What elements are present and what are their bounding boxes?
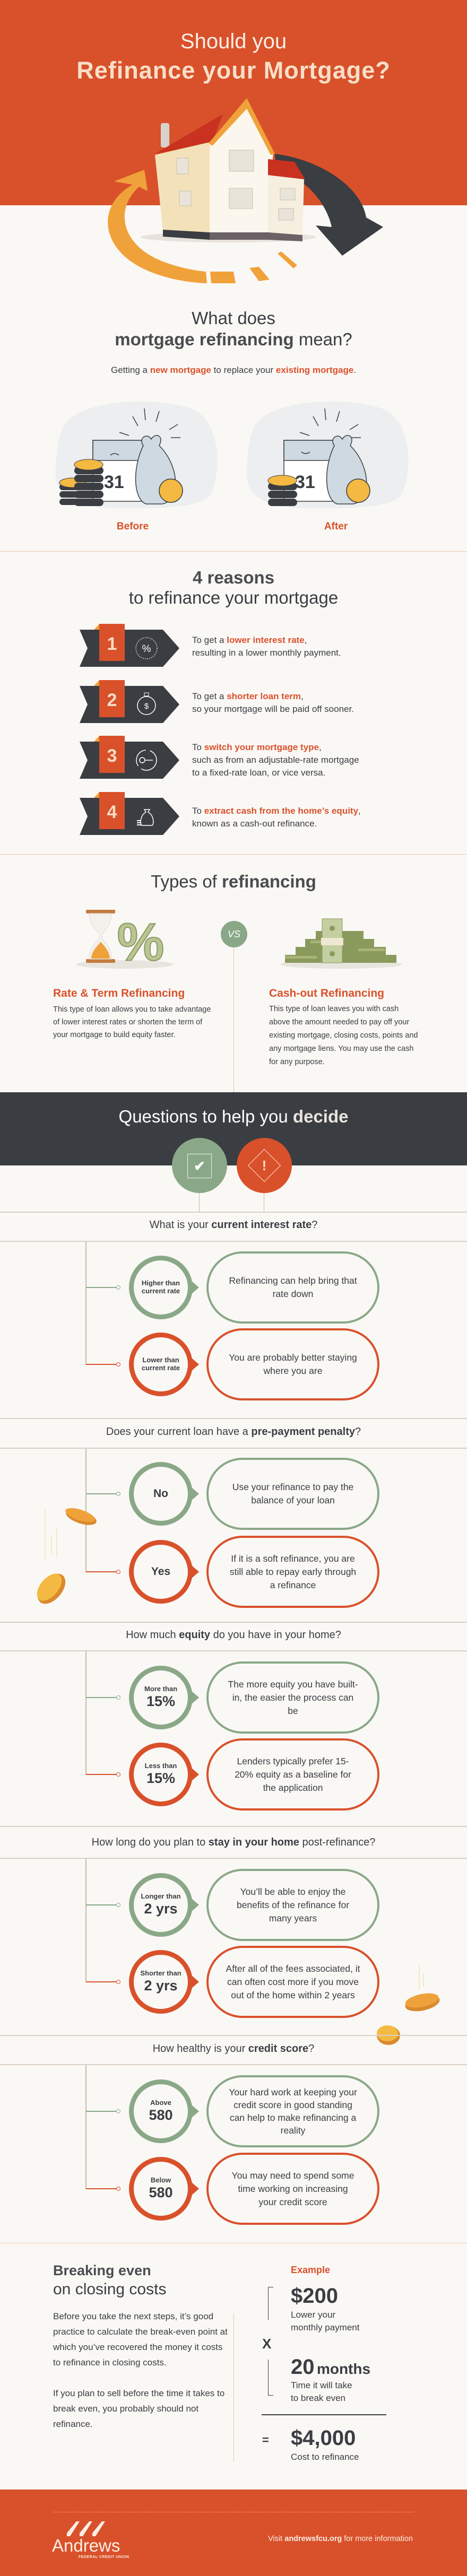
- icon: check: [172, 1138, 227, 1193]
- panel: example calculation: $4,000: [291, 2426, 356, 2450]
- ribbon 4: [80, 792, 179, 835]
- option: yes: If it is a soft refinance, you are still able to repay early through a refinance: [230, 1553, 356, 1590]
- panel: rate & term: Rate & Term Refinancing: [53, 987, 185, 999]
- illustration: after: 31: [295, 472, 315, 492]
- panel: breaking even text: on closing costs: [53, 2281, 166, 2298]
- option: higher: Higher than: [142, 1279, 180, 1287]
- Q1: [0, 1212, 467, 1213]
- option: less than 15%: [86, 1738, 379, 1811]
- Q3: [0, 1622, 467, 1623]
- option: above 580: [86, 2075, 379, 2147]
- panel: example calculation: Cost to refinance: [291, 2452, 359, 2462]
- text: reason 4: known as a cash-out refinance.: [192, 819, 317, 829]
- text: visit: Visit andrewsfcu.org for more information: [268, 2535, 413, 2543]
- ribbon 3: [80, 736, 179, 779]
- heading: 4 reasons: [129, 568, 338, 607]
- text: reason 2: To get a shorter loan term,: [192, 691, 304, 701]
- option: shorter than 2 yrs: Shorter than: [140, 1969, 181, 1977]
- illustration: before: 31: [104, 472, 124, 492]
- option: no: [86, 1458, 379, 1530]
- text: reason 3: [192, 742, 359, 778]
- panel: breaking even text: Breaking even: [53, 2262, 151, 2278]
- heading: 4 reasons: 4 reasons: [193, 568, 274, 587]
- text: reason 1: resulting in a lower monthly payment.: [192, 648, 341, 658]
- questions band: [0, 1092, 467, 1165]
- ribbon 1: %: [142, 643, 151, 655]
- ribbon 2: 2: [107, 690, 117, 710]
- option: above 580: 580: [149, 2107, 173, 2123]
- option: lower: Lower than: [142, 1356, 179, 1364]
- panel: rate & term: This type of loan allows you to take advantage of lower interest rates or shorten the term of your mortgage to build equity faster.: [53, 1005, 211, 1039]
- illustration: house with arrows: [108, 98, 383, 283]
- option: lower: current rate: [142, 1364, 180, 1372]
- panel: breaking even text: If you plan to sell before the time it takes to break even, you probably should not refinance.: [53, 2388, 224, 2429]
- heading: 4 reasons: to refinance your mortgage: [129, 588, 338, 607]
- option: above 580: Your hard work at keeping your credit score in good standing can help to make refinancing a reality: [229, 2087, 357, 2136]
- Q2: [0, 1418, 467, 1419]
- ribbon 2: [80, 680, 179, 723]
- title: Should you: [180, 30, 287, 53]
- icon: coins falling left: [37, 1508, 97, 1604]
- option: lower: [86, 1328, 379, 1400]
- option: more than 15%: More than: [144, 1685, 177, 1693]
- text: reason 4: [192, 806, 361, 829]
- panel: example calculation: monthly payment: [291, 2322, 359, 2333]
- option: below 580: Below: [151, 2176, 171, 2184]
- option: more than 15%: The more equity you have built-in, the easier the process can be: [228, 1678, 358, 1716]
- icon: warning: !: [262, 1158, 266, 1173]
- icon: warning: [237, 1138, 292, 1193]
- header band: [0, 0, 467, 205]
- heading: what does refinancing mean: What does: [192, 308, 275, 328]
- option: more than 15%: [86, 1661, 379, 1734]
- heading: what does refinancing mean: [115, 308, 352, 349]
- icon: house: [141, 98, 316, 242]
- ribbon 3: 3: [107, 746, 117, 766]
- footer: [0, 2490, 467, 2576]
- panel: example calculation: Example: [291, 2265, 330, 2275]
- option: yes: [86, 1536, 379, 1608]
- text: reason 4: To extract cash from the home’s equity,: [192, 806, 361, 816]
- option: less than 15%: Less than: [145, 1762, 177, 1770]
- option: below 580: [86, 2153, 379, 2225]
- logo: Andrews: FEDERAL CREDIT UNION: [79, 2555, 129, 2559]
- question 4: How long do you plan to stay in your home post-refinance?: [92, 1837, 375, 1848]
- option: shorter than 2 yrs: 2 yrs: [144, 1978, 178, 1994]
- option: below 580: 580: [149, 2185, 173, 2200]
- panel: example calculation: [262, 2265, 386, 2462]
- panel: example calculation: =: [262, 2433, 269, 2447]
- option: below 580: You may need to spend some time working on increasing your credit score: [232, 2170, 354, 2207]
- ribbon 2: $: [144, 702, 149, 711]
- text: reason 3: to a fixed-rate loan, or vice versa.: [192, 768, 325, 778]
- text: reason 1: To get a lower interest rate,: [192, 635, 307, 645]
- panel: breaking even text: [53, 2262, 228, 2429]
- logo: Andrews: [52, 2520, 137, 2563]
- option: above 580: Above: [150, 2099, 171, 2107]
- text: reason 3: such as from an adjustable-rate mortgage: [192, 755, 359, 765]
- icon: hourglass and percent: %: [117, 912, 164, 971]
- panel: cash-out: Cash-out Refinancing: [269, 987, 384, 999]
- heading: what does refinancing mean: mortgage refinancing mean?: [115, 329, 352, 349]
- text: definition: Getting a new mortgage to replace your existing mortgage.: [111, 365, 356, 375]
- title: [76, 30, 391, 84]
- option: no: Use your refinance to pay the balance of your loan: [232, 1482, 353, 1505]
- option: less than 15%: 15%: [146, 1770, 175, 1786]
- option: yes: Yes: [151, 1565, 170, 1578]
- ribbon 1: [80, 624, 179, 667]
- text: reason 3: To switch your mortgage type,: [192, 742, 322, 752]
- icon: orange arrow: [108, 170, 297, 283]
- panel: example calculation: Lower your: [291, 2310, 335, 2320]
- icon: coins falling right: [377, 1965, 439, 2045]
- panel: breaking even text: Before you take the next steps, it’s good practice to calculate the break-even point at which you’ve recovered the money it costs to refinance in closing costs.: [53, 2311, 228, 2368]
- question 5: How healthy is your credit score?: [153, 2043, 314, 2055]
- icon: check: ✔: [194, 1158, 205, 1174]
- connector lines from icons: [199, 1188, 200, 1212]
- question 1: What is your current interest rate?: [150, 1219, 317, 1231]
- panel: cash-out: This type of loan leaves you with cash above the amount needed to pay off your existing mortgage, closing costs, points and any mortgage liens. You may use the cash for any purpose.: [269, 1005, 418, 1066]
- question 3: How much equity do you have in your home?: [126, 1629, 341, 1641]
- panel: example calculation: Time it will take: [291, 2380, 352, 2390]
- heading: types of refinancing: Types of refinancing: [151, 872, 316, 891]
- ribbon 1: 1: [107, 634, 117, 654]
- panel: rate & term: [53, 987, 211, 1039]
- title: Refinance your Mortgage?: [76, 57, 391, 84]
- option: higher: [86, 1251, 379, 1324]
- icon: hourglass and percent: [76, 910, 174, 971]
- icon: dark arrow: [275, 154, 383, 256]
- option: higher: current rate: [142, 1287, 180, 1295]
- option: shorter than 2 yrs: [86, 1946, 379, 2018]
- panel: example calculation: $200: [291, 2284, 338, 2308]
- option: longer than 2 yrs: 2 yrs: [144, 1901, 178, 1917]
- label: after: After: [324, 521, 348, 532]
- icon: money pile: [280, 919, 402, 969]
- option: longer than 2 yrs: You’ll be able to enjoy the benefits of the refinance for many years: [237, 1886, 349, 1924]
- ribbon 4: 4: [107, 802, 117, 822]
- heading: questions: Questions to help you decide: [119, 1107, 348, 1126]
- option: longer than 2 yrs: [86, 1869, 379, 1941]
- vs circle and divider: [233, 947, 234, 1092]
- panel: example calculation: X: [262, 2336, 271, 2352]
- text: VS: [228, 929, 240, 939]
- text: reason 2: [192, 691, 354, 714]
- text: reason 1: [192, 635, 341, 658]
- label: before: Before: [117, 521, 149, 532]
- panel: example calculation: to break even: [291, 2393, 345, 2403]
- illustration: after: [246, 402, 409, 508]
- option: more than 15%: 15%: [146, 1693, 175, 1709]
- option: higher: Refinancing can help bring that rate down: [229, 1275, 357, 1299]
- panel: example calculation: 20 months: [291, 2355, 370, 2379]
- question 2: Does your current loan have a pre-payment penalty?: [106, 1426, 361, 1438]
- text: reason 2: so your mortgage will be paid off sooner.: [192, 704, 354, 714]
- Q4: [0, 1826, 467, 1827]
- option: less than 15%: Lenders typically prefer 15-20% equity as a baseline for the application: [235, 1756, 351, 1793]
- illustration: before: [55, 402, 218, 508]
- Q5: [0, 2035, 467, 2036]
- option: no: No: [153, 1487, 168, 1500]
- logo: Andrews: Andrews: [52, 2536, 120, 2555]
- option: shorter than 2 yrs: After all of the fees associated, it can often cost more if you move out of the home within 2 years: [226, 1963, 360, 2000]
- option: longer than 2 yrs: Longer than: [141, 1892, 181, 1900]
- option: lower: You are probably better staying where you are: [229, 1352, 357, 1376]
